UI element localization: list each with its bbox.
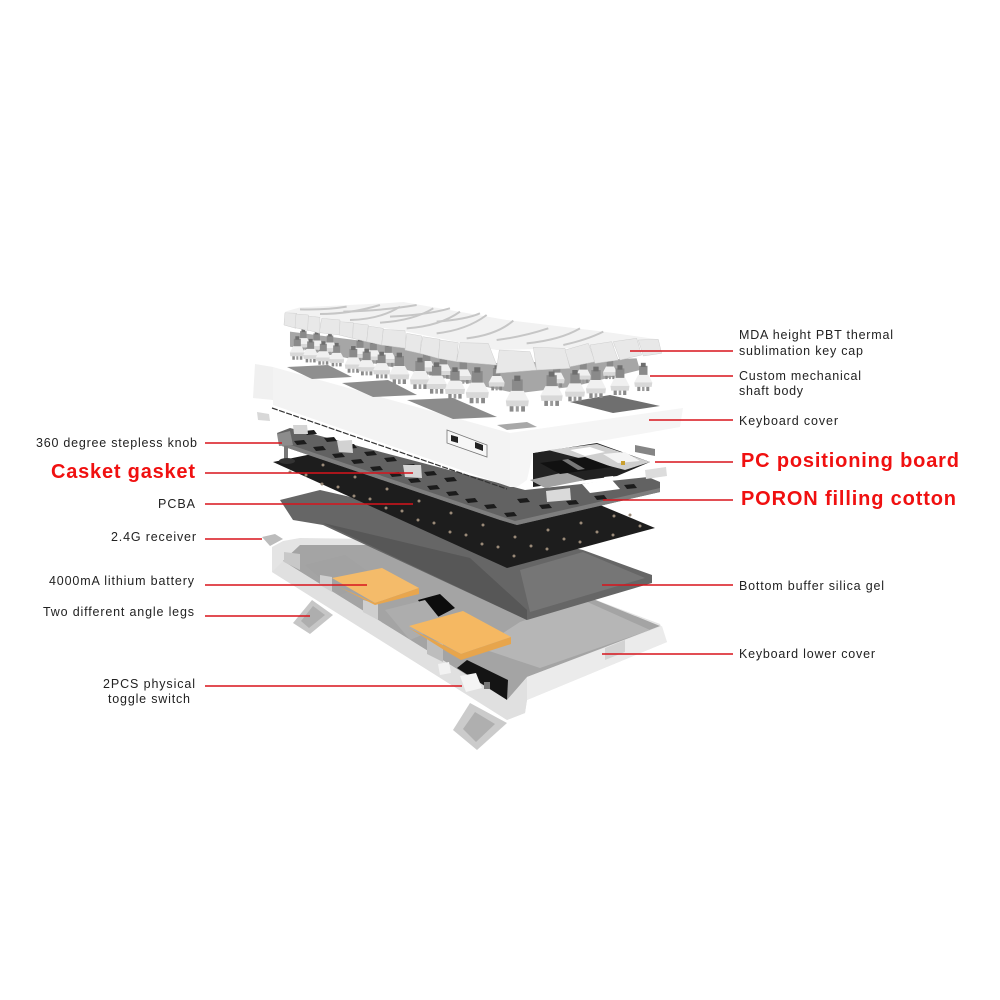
label: PC positioning board: PC positioning board bbox=[741, 450, 959, 472]
keyboard exploded illustration bbox=[253, 302, 683, 750]
bottom buffer silica gel bbox=[280, 490, 652, 620]
angle legs bbox=[293, 600, 507, 750]
label: knob: 360 degree stepless knob bbox=[36, 436, 197, 450]
label: shaft body: shaft body bbox=[739, 384, 804, 398]
front row of switches bbox=[290, 336, 652, 412]
label: toggle switch bbox=[103, 677, 462, 706]
PCBA board bbox=[273, 453, 655, 568]
label: receiver: 2.4G receiver bbox=[111, 530, 196, 544]
lithium batteries bbox=[332, 568, 511, 660]
label: lithium battery: 4000mA lithium battery bbox=[49, 574, 195, 588]
label: key cap: sublimation key cap bbox=[739, 344, 863, 358]
cover switch cutouts bbox=[447, 430, 487, 457]
label: shaft body: Custom mechanical bbox=[739, 369, 861, 383]
PC positioning board bbox=[530, 443, 650, 488]
label: PCBA: PCBA bbox=[158, 497, 196, 511]
label: bottom buffer silica gel: Bottom buffer silica gel bbox=[739, 579, 884, 593]
keyboard lower cover bbox=[262, 534, 667, 720]
label: casket gasket: Casket gasket bbox=[51, 461, 195, 483]
label: keyboard lower cover: Keyboard lower cover bbox=[739, 647, 875, 661]
label: shaft body bbox=[650, 369, 861, 398]
toggle switches bbox=[438, 662, 490, 692]
mechanical switches and key caps, drawn in local scale bbox=[284, 302, 662, 412]
gasket pads bbox=[257, 412, 667, 502]
label: angle legs: Two different angle legs bbox=[43, 605, 194, 619]
label: key cap: MDA height PBT thermal bbox=[739, 328, 893, 342]
key cap fronts bbox=[284, 313, 662, 373]
label: toggle switch: 2PCS physical bbox=[103, 677, 195, 691]
label: PORON filling cotton: PORON filling cotton bbox=[741, 488, 956, 510]
keyboard cover bbox=[253, 361, 683, 489]
label: keyboard cover: Keyboard cover bbox=[739, 414, 838, 428]
label: toggle switch: toggle switch bbox=[108, 692, 190, 706]
switch band bbox=[290, 332, 640, 393]
key cap tops bbox=[285, 302, 658, 350]
back row of switches bbox=[296, 329, 617, 390]
360 degree knob bbox=[277, 431, 295, 464]
PORON filling cotton plate bbox=[277, 428, 660, 525]
label: key cap bbox=[630, 328, 893, 358]
